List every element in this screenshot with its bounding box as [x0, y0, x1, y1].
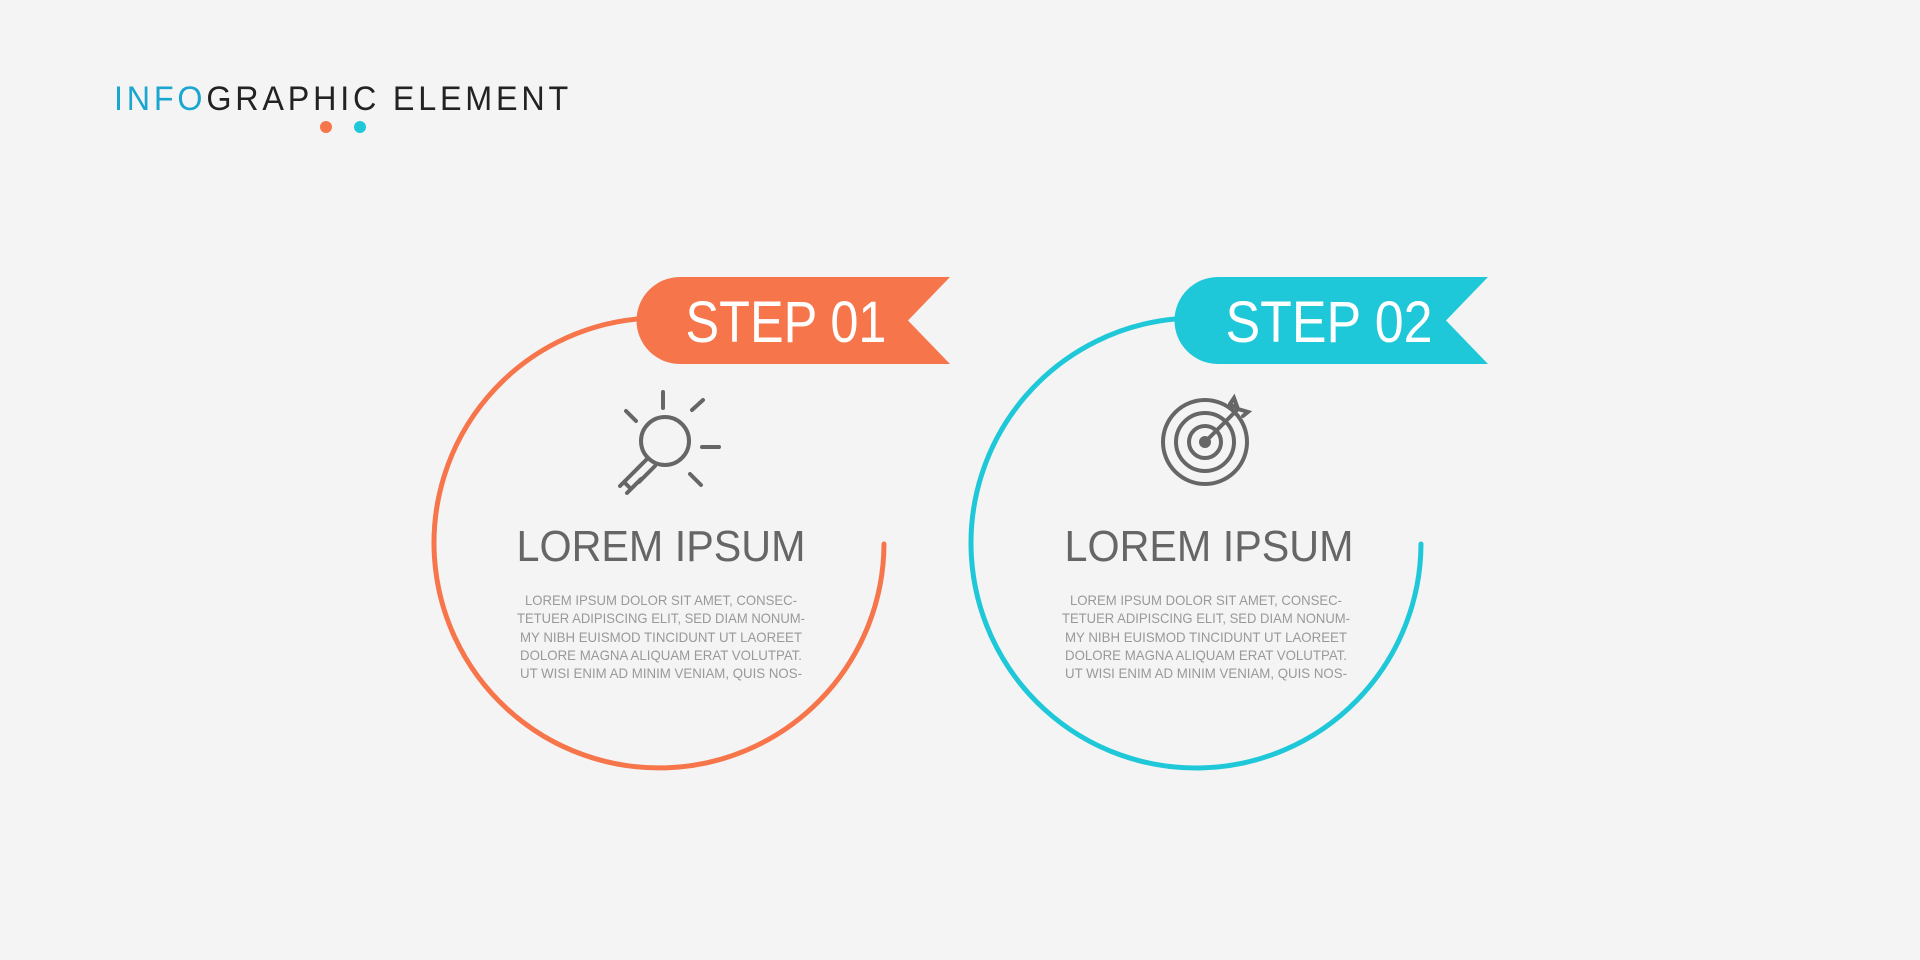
icon: lightbulb [620, 392, 719, 493]
body text 2: LOREM IPSUM DOLOR SIT AMET, CONSEC- [1070, 592, 1342, 608]
banner: step 02: STEP 02 [1226, 290, 1432, 355]
title dots [320, 121, 366, 133]
circle arc 2 [971, 319, 1421, 768]
title [114, 80, 572, 133]
body text 2: MY NIBH EUISMOD TINCIDUNT UT LAOREET [1065, 629, 1347, 645]
body text 1: LOREM IPSUM DOLOR SIT AMET, CONSEC- [525, 592, 797, 608]
body text 1: DOLORE MAGNA ALIQUAM ERAT VOLUTPAT. [520, 647, 802, 663]
body text 1 [517, 592, 805, 681]
body text 2: UT WISI ENIM AD MINIM VENIAM, QUIS NOS- [1065, 665, 1347, 681]
body text 1: TETUER ADIPISCING ELIT, SED DIAM NONUM- [517, 610, 805, 626]
body text 2: TETUER ADIPISCING ELIT, SED DIAM NONUM- [1062, 610, 1350, 626]
banner: step 02 [1174, 277, 1488, 364]
panel: step 01 [434, 277, 950, 768]
icon: target [1163, 398, 1248, 484]
banner: step 01 [636, 277, 950, 364]
heading: lorem ipsum 2: LOREM IPSUM [1064, 522, 1354, 571]
body text 1: MY NIBH EUISMOD TINCIDUNT UT LAOREET [520, 629, 802, 645]
body text 1: UT WISI ENIM AD MINIM VENIAM, QUIS NOS- [520, 665, 802, 681]
circle arc 1 [434, 319, 884, 768]
body text 2: DOLORE MAGNA ALIQUAM ERAT VOLUTPAT. [1065, 647, 1347, 663]
banner: step 01: STEP 01 [686, 290, 886, 355]
title: INFOGRAPHIC ELEMENT [114, 80, 572, 118]
body text 2 [1062, 592, 1350, 681]
heading: lorem ipsum 1: LOREM IPSUM [516, 522, 806, 571]
panel: step 02 [971, 277, 1488, 768]
